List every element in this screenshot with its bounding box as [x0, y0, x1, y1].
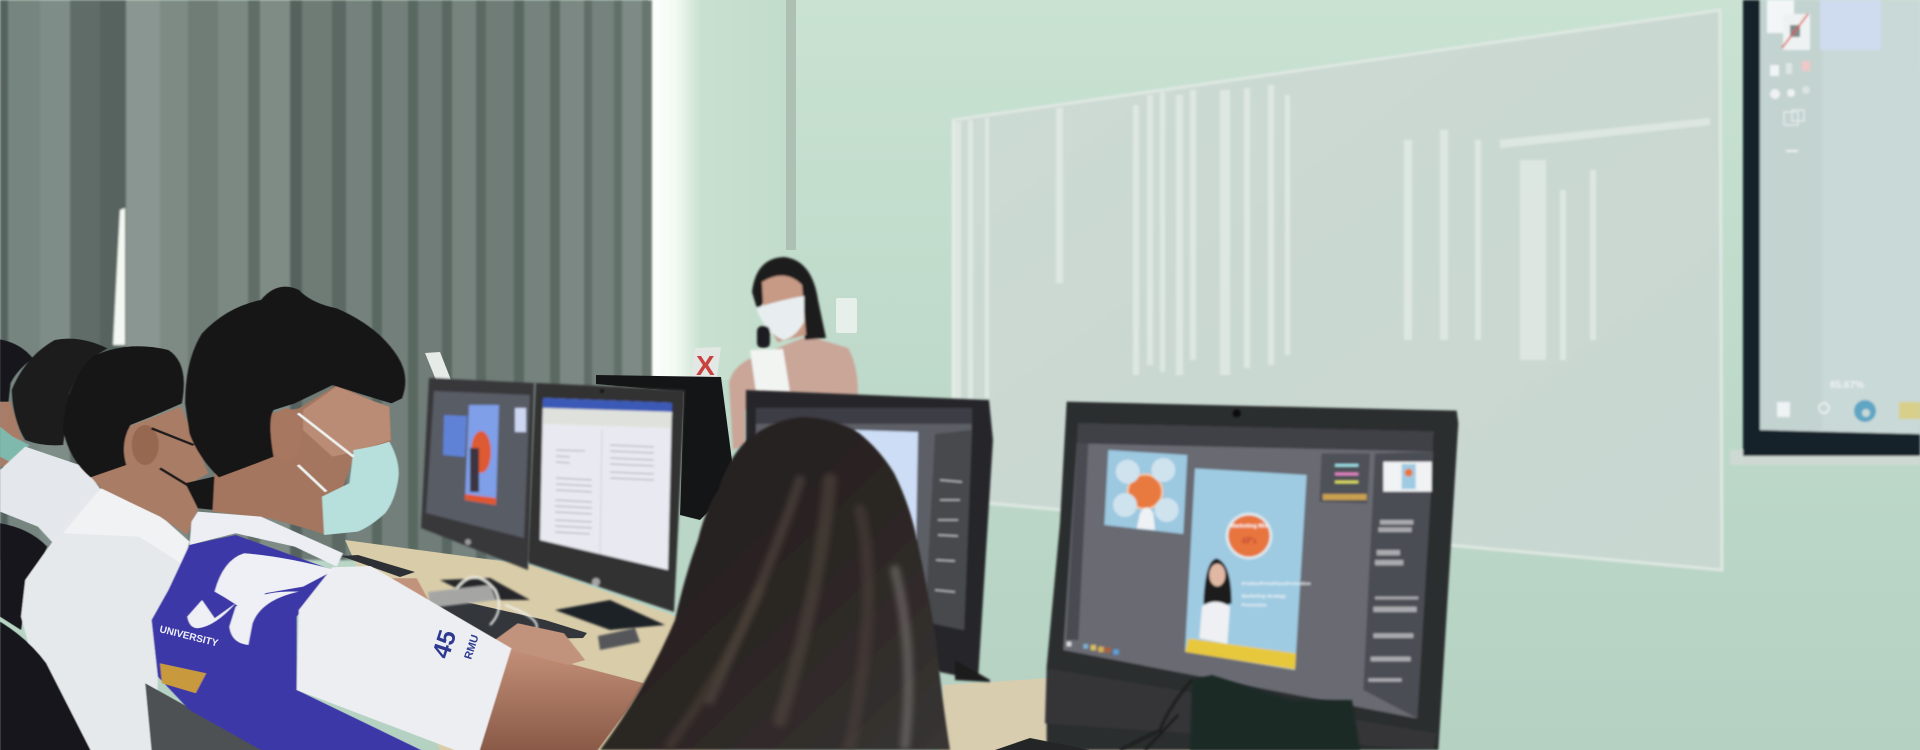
- thumbnail: [443, 415, 467, 457]
- main student: [152, 287, 644, 750]
- desk items: [428, 577, 665, 650]
- orange circle: [1226, 513, 1272, 559]
- orange circle: [471, 431, 491, 473]
- shirt shade: [63, 488, 189, 563]
- students: [0, 287, 644, 750]
- document screen: [540, 398, 672, 570]
- cables: [450, 577, 537, 640]
- chair back row: [0, 523, 47, 630]
- hair: [63, 346, 184, 477]
- monitor 3 screen: [756, 408, 972, 630]
- paper card on monitor: [425, 352, 451, 380]
- pouch cable: [1120, 680, 1192, 750]
- hp logo: [592, 578, 600, 586]
- chest text line: UNIVERSITY: [158, 624, 219, 650]
- webcam: [1232, 409, 1241, 418]
- shirt: [0, 447, 101, 545]
- paper held by teacher: [750, 349, 790, 392]
- neck and head skin: [213, 385, 391, 535]
- monitor bezel: [1047, 402, 1458, 750]
- desk: [345, 540, 720, 750]
- presenter figure: [470, 448, 479, 492]
- poster text: Promotion: [1242, 603, 1267, 609]
- main keyboard: [427, 600, 587, 640]
- projected taskbar: [1777, 400, 1920, 422]
- poster text: [1242, 581, 1311, 609]
- mask: [322, 442, 399, 535]
- card with red x: X: [696, 350, 715, 381]
- app top bar: [1077, 423, 1433, 452]
- arm: [476, 647, 644, 750]
- card with red x: [690, 347, 721, 384]
- folded mask on desk: [428, 585, 496, 608]
- hair highlights: [670, 480, 908, 745]
- webcam: [600, 389, 604, 393]
- thumbnail circle: [1128, 474, 1162, 509]
- document text: [555, 445, 654, 534]
- screen: [1063, 423, 1433, 718]
- face highlight: [303, 387, 391, 457]
- tablet: [555, 600, 665, 630]
- monitor 1 screen: [426, 391, 530, 538]
- front student long hair: [600, 417, 950, 750]
- teacher hair: [752, 257, 826, 340]
- poster: [855, 430, 918, 540]
- hair: [185, 287, 405, 477]
- window light strip and wall column: [648, 0, 796, 380]
- thumbnail figure: [1137, 507, 1155, 530]
- projected toolbar icons: [1767, 0, 1810, 152]
- orange band: [465, 494, 496, 505]
- shirt: [21, 488, 189, 750]
- monitor 3 behind hair: [746, 390, 993, 682]
- thumbnail: [943, 437, 970, 459]
- taskbar icons: [1067, 642, 1119, 655]
- left hand: [385, 578, 430, 603]
- thermostat: [836, 298, 857, 333]
- orange circle: Marketing Mix: [1230, 523, 1269, 529]
- logo: [187, 553, 335, 645]
- monitor chin: [1045, 668, 1437, 750]
- poster yellow band: [1185, 638, 1296, 669]
- mask pouch on main monitor: [1120, 675, 1360, 750]
- face: [90, 407, 208, 535]
- teacher: [729, 257, 858, 450]
- poster woman: [1199, 558, 1232, 644]
- orange circle: 4P's: [1241, 536, 1257, 546]
- monitor 3 stand: [955, 660, 990, 682]
- hp logo: [465, 539, 471, 545]
- colour panel: [1319, 453, 1370, 503]
- teacher body: [729, 336, 858, 450]
- monitor 2 word document: [528, 383, 685, 612]
- side keyboard: [341, 555, 415, 577]
- far student: [0, 339, 33, 467]
- ribbon: [543, 398, 672, 412]
- second student: [21, 346, 217, 750]
- ear: [271, 408, 301, 462]
- hair: [12, 339, 107, 445]
- gold emblem: [160, 663, 206, 693]
- poster text: Marketing strategy: [1242, 593, 1286, 599]
- front keyboard: [995, 738, 1090, 750]
- poster: [1185, 468, 1307, 670]
- collar: [189, 512, 343, 567]
- tablet back left: [440, 578, 530, 600]
- window reflections on board: [953, 85, 1710, 422]
- sleeve print: [427, 627, 482, 662]
- microphone: [757, 326, 770, 348]
- ear: [132, 425, 159, 465]
- projector screen: [1730, 0, 1920, 465]
- sleeve: [297, 566, 511, 750]
- mask straps: [298, 413, 354, 492]
- teacher face: [762, 276, 806, 342]
- sleeve number: 45: [427, 627, 462, 662]
- properties panel: [1363, 452, 1433, 718]
- artboard thumbnail: [1104, 450, 1187, 534]
- black mask: [185, 476, 217, 510]
- hand on mouse: [492, 623, 585, 665]
- mask strap: [152, 428, 194, 485]
- phone: [598, 628, 640, 650]
- curtains: [0, 0, 652, 560]
- left tool bar: [1066, 443, 1088, 640]
- back row monitor: [596, 375, 733, 520]
- tool panel: [925, 430, 972, 630]
- projected zoom level: 85.67%: [1830, 380, 1864, 391]
- purple shirt: [152, 535, 421, 750]
- monitor 1: [421, 378, 534, 570]
- right desk: [940, 678, 1190, 750]
- poster: [465, 405, 499, 505]
- main monitor: [1045, 402, 1458, 750]
- sleeve text: RMU: [462, 633, 482, 661]
- poster text: ProductPricePlacePromotion: [1242, 581, 1311, 587]
- teacher mask: [756, 296, 804, 340]
- front chair: [0, 622, 90, 750]
- third student: [0, 339, 107, 545]
- whiteboard: [953, 10, 1722, 570]
- main student chair: [145, 683, 261, 750]
